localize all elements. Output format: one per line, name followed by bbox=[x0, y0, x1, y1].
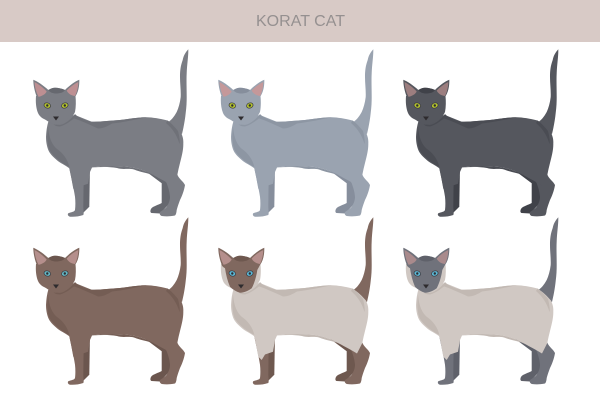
cat: solid blue grey bbox=[33, 49, 188, 217]
header band bbox=[0, 0, 600, 42]
cat: cream with brown points bbox=[218, 217, 373, 385]
cat: solid chocolate brown bbox=[33, 217, 188, 385]
cat: cream with grey points bbox=[403, 217, 558, 385]
title: KORAT CAT bbox=[256, 13, 345, 30]
cat: solid charcoal bbox=[403, 49, 558, 217]
cat: solid light silver blue bbox=[218, 49, 373, 217]
